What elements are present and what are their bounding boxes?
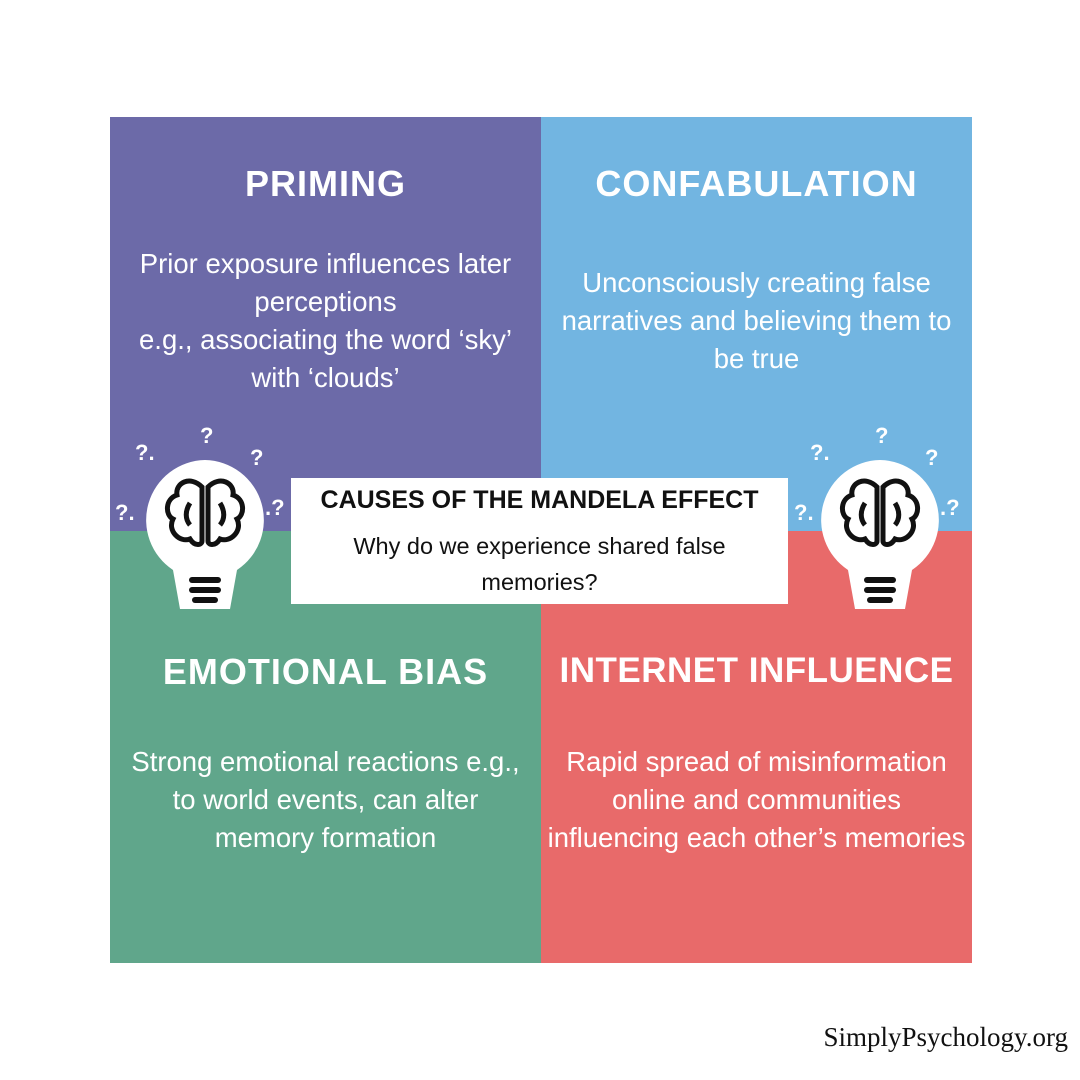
text: priming: [139, 248, 512, 393]
heading: confabulation: CONFABULATION: [595, 163, 918, 204]
icon: left lightbulb: ?: [200, 423, 213, 448]
text: emotional bias: memory formation: [215, 822, 436, 853]
center title box: [291, 478, 788, 604]
icon: right lightbulb: ?: [925, 445, 938, 470]
icon: left lightbulb: .?: [265, 495, 285, 520]
text: confabulation: be true: [714, 343, 799, 374]
footer: source: SimplyPsychology.org: [823, 1022, 1068, 1052]
icon: left lightbulb: [115, 423, 285, 609]
text: internet influence: Rapid spread of misinformation: [566, 746, 947, 777]
subtitle: memories?: [481, 569, 598, 595]
heading: priming: PRIMING: [245, 163, 406, 204]
panel: confabulation: [541, 117, 972, 531]
heading: internet influence: INTERNET INFLUENCE: [560, 651, 954, 690]
text: emotional bias: Strong emotional reactions e.g.,: [131, 746, 520, 777]
heading: main title: CAUSES OF THE MANDELA EFFECT: [321, 486, 758, 514]
icon: right lightbulb: ?.: [810, 440, 830, 465]
text: confabulation: narratives and believing them to: [562, 305, 951, 336]
text: priming: Prior exposure influences later: [140, 248, 511, 279]
subtitle: [353, 533, 726, 595]
text: internet influence: online and communities: [612, 784, 901, 815]
text: confabulation: [562, 267, 951, 374]
heading: emotional bias: EMOTIONAL BIAS: [163, 651, 488, 692]
icon: left lightbulb: ?.: [115, 500, 135, 525]
icon: left lightbulb: ?.: [135, 440, 155, 465]
icon: right lightbulb: ?.: [794, 500, 814, 525]
text: priming: with ‘clouds’: [251, 362, 400, 393]
icon: right lightbulb: [794, 423, 960, 609]
panel: priming: [110, 117, 541, 531]
text: emotional bias: to world events, can alter: [173, 784, 478, 815]
text: priming: perceptions: [254, 286, 397, 317]
panel: emotional bias: [110, 531, 541, 963]
text: priming: e.g., associating the word ‘sky’: [139, 324, 512, 355]
icon: left lightbulb: ?: [250, 445, 263, 470]
icon: right lightbulb: .?: [940, 495, 960, 520]
panel: internet influence: [541, 531, 972, 963]
text: internet influence: [548, 746, 965, 853]
text: confabulation: Unconsciously creating false: [582, 267, 931, 298]
text: emotional bias: [131, 746, 520, 853]
subtitle: Why do we experience shared false: [353, 533, 726, 559]
icon: right lightbulb: ?: [875, 423, 888, 448]
text: internet influence: influencing each other’s memories: [548, 822, 965, 853]
